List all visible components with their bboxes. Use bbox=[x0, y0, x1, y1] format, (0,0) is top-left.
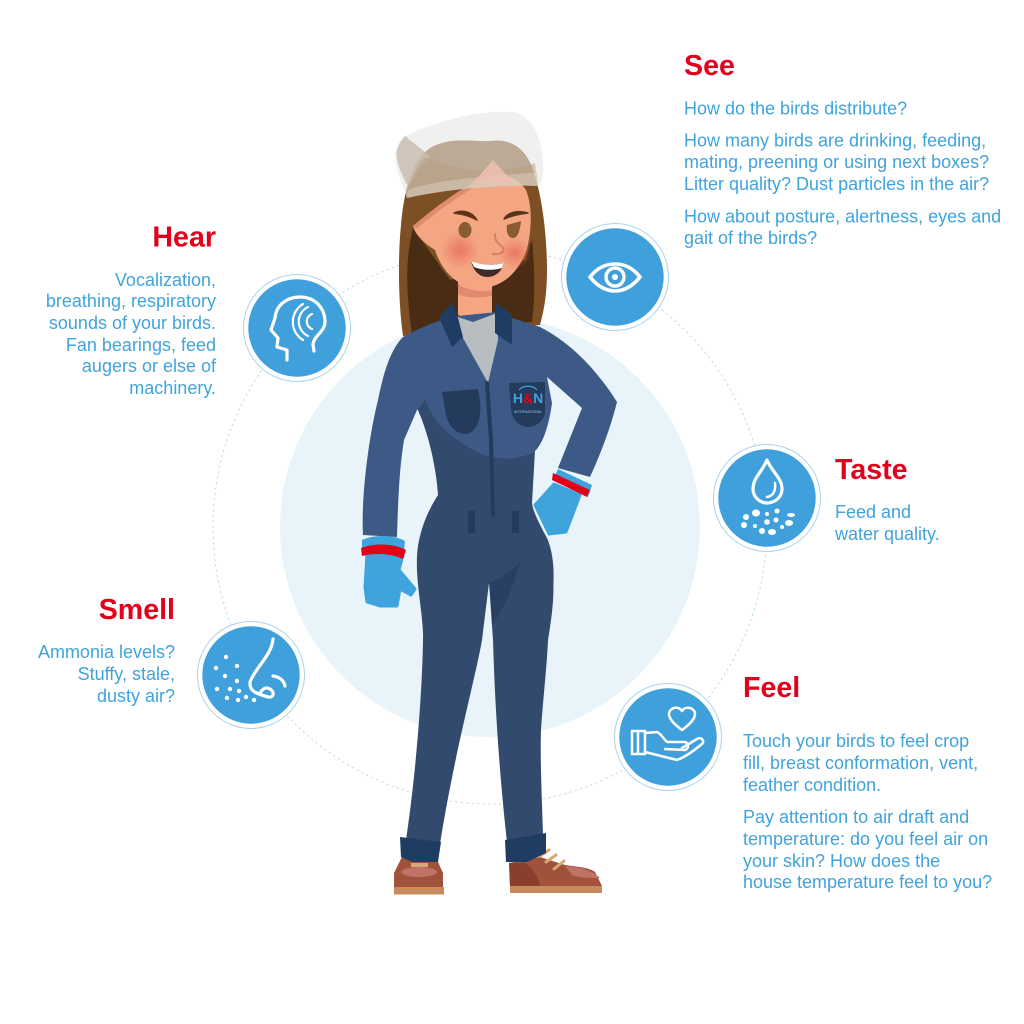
mouth bbox=[471, 261, 504, 277]
dashed orbit ring bbox=[213, 250, 767, 804]
right glove bbox=[535, 469, 592, 534]
badge: INTERNATIONAL bbox=[514, 410, 542, 414]
section: feel bbox=[743, 672, 992, 892]
waist tabs bbox=[468, 511, 519, 533]
section: feel: Feel bbox=[743, 672, 800, 704]
pocket bbox=[442, 389, 480, 434]
teeth bbox=[471, 261, 504, 270]
face bbox=[413, 172, 531, 288]
cheeks bbox=[441, 231, 479, 269]
section: see: See bbox=[684, 50, 735, 82]
icon: smell bbox=[198, 622, 304, 728]
icon: see bbox=[562, 224, 668, 330]
section: smell: Ammonia levels? bbox=[38, 642, 175, 662]
zipper bbox=[487, 383, 493, 515]
neck bbox=[458, 280, 492, 322]
collar left bbox=[439, 302, 463, 347]
section: feel: feather condition. bbox=[743, 775, 881, 795]
section: hear: augers or else of bbox=[82, 356, 217, 376]
section: smell: dusty air? bbox=[97, 686, 175, 706]
background circle bbox=[280, 317, 700, 737]
neck shadow bbox=[458, 284, 492, 297]
hair back bbox=[399, 140, 547, 336]
section: feel: your skin? How does the bbox=[743, 851, 940, 871]
section: hear: Hear bbox=[152, 222, 216, 254]
section: feel: house temperature feel to you? bbox=[743, 872, 992, 892]
badge bbox=[509, 382, 545, 427]
left glove bbox=[361, 536, 415, 606]
section: hear bbox=[46, 222, 217, 398]
section: see: gait of the birds? bbox=[684, 228, 817, 248]
hair shadow bbox=[407, 228, 534, 335]
leg crease bbox=[490, 562, 520, 625]
section: see: How many birds are drinking, feeding, bbox=[684, 130, 986, 150]
section: see: How do the birds distribute? bbox=[684, 98, 907, 118]
badge: H&N bbox=[513, 390, 543, 406]
section: see bbox=[684, 50, 1001, 248]
section: smell: Stuffy, stale, bbox=[78, 664, 175, 684]
right shoe bbox=[505, 833, 602, 893]
section: feel: Touch your birds to feel crop bbox=[743, 731, 969, 751]
torso upper bbox=[363, 312, 617, 537]
section: feel: Pay attention to air draft and bbox=[743, 807, 969, 827]
section: taste: Feed and bbox=[835, 502, 911, 522]
section: hear: breathing, respiratory bbox=[46, 291, 216, 311]
fringe shadow bbox=[413, 172, 496, 229]
section: smell: Smell bbox=[99, 594, 175, 626]
section: hear: Fan bearings, feed bbox=[66, 335, 216, 355]
section: smell bbox=[38, 594, 175, 706]
right leg bbox=[489, 510, 553, 842]
section: see: mating, preening or using next boxes? bbox=[684, 152, 989, 172]
section: see: How about posture, alertness, eyes and bbox=[684, 206, 1001, 226]
left shoe bbox=[394, 837, 444, 894]
section: hear: Vocalization, bbox=[115, 270, 216, 290]
shirt bbox=[458, 313, 498, 383]
icon: taste bbox=[714, 444, 820, 552]
left leg bbox=[406, 520, 520, 844]
section: feel: fill, breast conformation, vent, bbox=[743, 753, 978, 773]
section: taste bbox=[834, 454, 940, 544]
eyes and brows bbox=[454, 211, 528, 238]
hair net cover bbox=[395, 112, 543, 198]
collar right bbox=[495, 303, 512, 345]
character: farm worker bbox=[361, 112, 617, 895]
icon: hear bbox=[244, 274, 350, 382]
section: hear: machinery. bbox=[129, 378, 216, 398]
torso lower bbox=[417, 370, 554, 590]
section: taste: Taste bbox=[835, 454, 908, 486]
section: see: Litter quality? Dust particles in the air? bbox=[684, 174, 989, 194]
section: taste: water quality. bbox=[834, 524, 940, 544]
nose bbox=[493, 234, 503, 254]
icon: feel bbox=[614, 684, 722, 790]
section: hear: sounds of your birds. bbox=[49, 313, 216, 333]
section: feel: temperature: do you feel air on bbox=[743, 829, 988, 849]
